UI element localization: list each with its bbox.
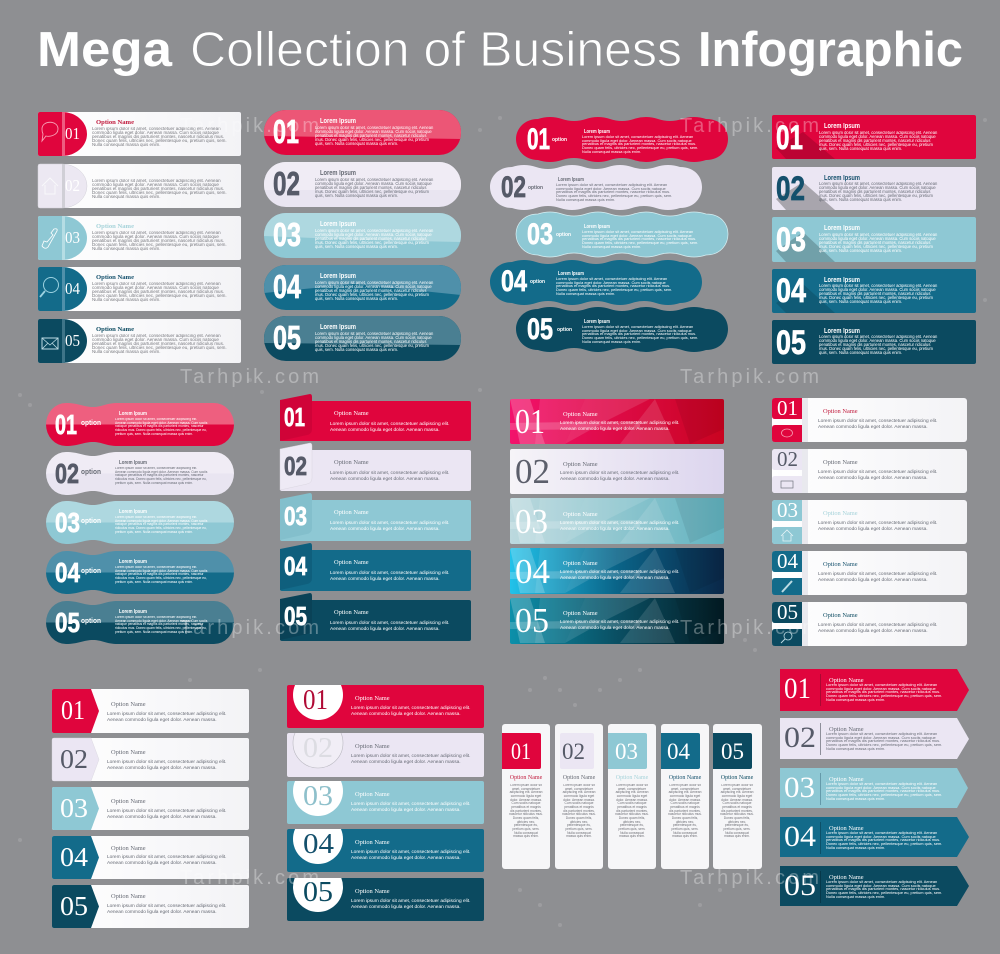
row 02	[38, 164, 241, 208]
watermarks: Tarhpik.com	[680, 617, 820, 639]
row 02	[772, 447, 967, 493]
column 05: Option Name	[721, 775, 754, 781]
row 03: Aenean commodo ligula eget dolor. Aenean massa.	[560, 526, 670, 532]
row 05: Lorem Ipsum	[824, 328, 860, 335]
row 03: Aenean commodo ligula eget dolor. Aenean massa.	[351, 807, 461, 813]
title	[37, 23, 963, 77]
panel: arrow banners	[780, 669, 969, 906]
row 03	[772, 498, 967, 544]
row 02: Aenean commodo ligula eget dolor. Aenean massa.	[818, 475, 928, 481]
row 04: Aenean commodo ligula eget dolor. Aenean massa.	[818, 577, 928, 583]
row 05: Lorem ipsum dolor sit amet, consectetuer adipiscing elit.	[330, 621, 449, 626]
row 03: 03	[284, 501, 307, 531]
row 02: 02	[284, 451, 307, 481]
row 02	[510, 449, 724, 494]
row 05: Aenean commodo ligula eget dolor. Aenean massa.	[818, 628, 928, 634]
row 03: Lorem ipsum dolor sit amet, consectetuer adipiscing elit.	[351, 802, 470, 807]
row 05	[38, 319, 241, 363]
row 02: 02	[777, 447, 798, 471]
row 03	[52, 787, 249, 830]
column 02	[555, 724, 603, 869]
row 01: Aenean commodo ligula eget dolor. Aenean massa.	[560, 426, 670, 432]
column 03: Lorem ipsum dolor sit amet, consectetuer adipiscing elit. Aenean commodo ligula eget dolor. Aenean massa. Cum sociis natoque penatibus et magnis dis parturient montes, nascetur ridiculus mus. Donec quam felis, ultricies nec, pellentesque eu, pretium quis, sem. Nulla consequat massa quis enim.	[615, 784, 649, 838]
row 03	[510, 498, 724, 544]
row 01: 01	[55, 409, 77, 440]
row 02: Aenean commodo ligula eget dolor. Aenean massa.	[351, 759, 461, 765]
row 03: Lorem ipsum dolor sit amet, consectetuer adipiscing elit.	[818, 521, 937, 526]
row 01: Lorem ipsum dolor sit amet, consectetuer adipiscing elit.	[351, 706, 470, 711]
watermarks: Tarhpik.com	[180, 867, 320, 889]
row 05: Lorem Ipsum	[320, 324, 356, 331]
row 01: Lorem ipsum dolor sit amet, consectetuer adipiscing elit.	[818, 419, 937, 424]
row 05	[287, 878, 484, 921]
column 03: Option Name	[616, 775, 649, 781]
row 04: Option Name	[111, 845, 146, 852]
row 03: Lorem Ipsum	[320, 221, 356, 228]
row 03	[780, 768, 968, 808]
column 01	[502, 724, 550, 869]
row 02: 02	[55, 458, 79, 489]
row 03	[772, 217, 976, 262]
column 01: Option Name	[510, 775, 543, 781]
panel: banners with white circle numbers	[287, 670, 484, 921]
row 04: 04	[65, 279, 80, 298]
row 03: Lorem Ipsum	[584, 224, 610, 230]
row 01: 01	[284, 402, 305, 432]
row 01: 01	[784, 672, 811, 705]
row 04: 04	[515, 552, 550, 591]
watermarks: Tarhpik.com	[180, 617, 320, 639]
row 05: Aenean commodo ligula eget dolor. Aenean massa.	[351, 904, 461, 910]
panel: wavy staggered banners	[490, 117, 728, 352]
row 02	[46, 452, 234, 495]
row 03: Lorem ipsum dolor sit amet, consectetuer adipiscing elit.	[330, 521, 449, 526]
row 01	[52, 689, 249, 733]
row 02: Option Name	[111, 749, 146, 756]
row 05: Option Name	[563, 610, 598, 617]
row 01: Aenean commodo ligula eget dolor. Aenean massa.	[818, 424, 928, 430]
row 04: Option Name	[96, 274, 134, 281]
row 01: option	[552, 137, 568, 143]
row 01	[780, 669, 969, 711]
column 03: 03	[615, 739, 638, 764]
row 03: Aenean commodo ligula eget dolor. Aenean massa.	[107, 814, 217, 820]
row 05: 05	[65, 331, 80, 350]
row 05: 05	[273, 319, 301, 356]
row 05: Lorem ipsum dolor sit amet, consectetuer adipiscing elit.	[107, 904, 226, 909]
row 05: Option Name	[96, 326, 134, 333]
row 05: 05	[55, 607, 80, 638]
row 02: Lorem ipsum dolor sit amet, consectetuer adipiscing elit.	[107, 760, 226, 765]
row 03	[287, 781, 484, 824]
row 05: Option Name	[355, 888, 390, 895]
column 05	[713, 724, 762, 869]
row 05: option	[557, 327, 573, 333]
row 02: 02	[303, 732, 333, 764]
row 03: 03	[515, 502, 548, 541]
row 02: 02	[273, 165, 300, 202]
row 02	[264, 162, 461, 207]
row 01	[46, 403, 234, 446]
row 01: Lorem ipsum dolor sit amet, consectetuer adipiscing elit.	[107, 712, 226, 717]
row 04: Lorem Ipsum	[119, 559, 147, 565]
row 03: Option Name	[563, 511, 598, 518]
row 05: 05	[284, 601, 307, 631]
row 04: Option Name	[334, 559, 369, 566]
row 01	[516, 117, 728, 162]
row 01: Option Name	[563, 411, 598, 418]
row 02: Lorem Ipsum	[558, 177, 584, 183]
row 05: 05	[515, 601, 549, 640]
row 02: Option Name	[355, 743, 390, 750]
watermarks: Tarhpik.com	[180, 366, 320, 388]
row 01: 01	[65, 124, 80, 143]
row 03: Lorem ipsum dolor sit amet, consectetuer adipiscing elit.	[107, 809, 226, 814]
watermarks: Tarhpik.com	[180, 115, 320, 137]
row 02: 02	[65, 176, 80, 195]
row 05: 05	[303, 876, 333, 908]
row 05: 05	[784, 869, 816, 902]
row 04	[772, 269, 976, 313]
row 01: Aenean commodo ligula eget dolor. Aenean massa.	[330, 427, 440, 433]
row 01	[772, 115, 976, 159]
row 01: Option Name	[111, 701, 146, 708]
row 02: Option Name	[334, 459, 369, 466]
row 05: option	[81, 618, 101, 625]
row 04: 04	[273, 268, 301, 305]
column 04: Lorem ipsum dolor sit amet, consectetuer adipiscing elit. Aenean commodo ligula eget dolor. Aenean massa. Cum sociis natoque penatibus et magnis dis parturient montes, nascetur ridiculus mus. Donec quam felis, ultricies nec, pellentesque eu, pretium quis, sem. Nulla consequat massa quis enim.	[668, 784, 702, 838]
row 04: Lorem ipsum dolor sit amet, consectetuer adipiscing elit.	[330, 571, 449, 576]
row 03: option	[81, 518, 101, 525]
row 03: Option Name	[355, 791, 390, 798]
row 01: Lorem Ipsum	[824, 123, 860, 130]
row 01: Lorem Ipsum	[119, 411, 147, 417]
row 01: 01	[776, 119, 803, 157]
row 04: Lorem ipsum dolor sit amet, consectetuer adipiscing elit.	[560, 570, 679, 575]
row 05: Aenean commodo ligula eget dolor. Aenean massa.	[560, 625, 670, 631]
row 02: Lorem ipsum dolor sit amet, consectetuer adipiscing elit.	[351, 754, 470, 759]
row 04	[510, 548, 724, 594]
row 04: 04	[55, 557, 80, 588]
row 02: Aenean commodo ligula eget dolor. Aenean massa.	[560, 476, 670, 482]
row 04: option	[530, 279, 546, 285]
panel: rectangles with long shadow numbers	[772, 115, 976, 364]
row 04: Lorem Ipsum	[320, 273, 356, 280]
row 01: 01	[527, 123, 550, 156]
row 04: 04	[776, 272, 806, 310]
row 04	[38, 267, 241, 311]
row 01: option	[81, 420, 101, 427]
row 03	[280, 493, 471, 541]
panel: low-poly banners	[510, 399, 724, 644]
row 03: Option Name	[823, 510, 858, 517]
row 04: Lorem ipsum dolor sit amet, consectetuer adipiscing elit.	[351, 850, 470, 855]
row 03	[516, 212, 728, 257]
row 04: option	[81, 568, 101, 575]
row 02: 02	[784, 721, 816, 754]
row 02: Lorem Ipsum	[119, 460, 147, 466]
row 02: 02	[776, 170, 805, 208]
column 02: 02	[562, 739, 585, 764]
panel: half-circle tabs with icons	[38, 112, 241, 363]
row 02: Aenean commodo ligula eget dolor. Aenean massa.	[330, 476, 440, 482]
column 01: Lorem ipsum dolor sit amet, consectetuer adipiscing elit. Aenean commodo ligula eget dolor. Aenean massa. Cum sociis natoque penatibus et magnis dis parturient montes, nascetur ridiculus mus. Donec quam felis, ultricies nec, pellentesque eu, pretium quis, sem. Nulla consequat massa quis enim.	[509, 784, 543, 838]
row 01: Lorem ipsum dolor sit amet, consectetuer adipiscing elit.	[330, 422, 449, 427]
row 04: Aenean commodo ligula eget dolor. Aenean massa.	[330, 576, 440, 582]
row 03: 03	[65, 228, 80, 247]
row 01	[38, 112, 241, 156]
row 01: 01	[61, 695, 85, 725]
row 01: 01	[515, 402, 545, 441]
row 02: Lorem ipsum dolor sit amet, consectetuer adipiscing elit.	[330, 471, 449, 476]
panel: number and icon block cards	[772, 396, 967, 646]
column 03	[608, 724, 656, 869]
row 04: Aenean commodo ligula eget dolor. Aenean massa.	[107, 860, 217, 866]
row 02: Option Name	[823, 459, 858, 466]
row 04	[780, 817, 969, 857]
row 04: Lorem ipsum dolor sit amet, consectetuer adipiscing elit.	[107, 855, 226, 860]
row 04: 04	[501, 265, 527, 298]
row 01: Lorem Ipsum	[320, 118, 356, 125]
row 02	[287, 733, 484, 777]
row 03: Option Name	[334, 509, 369, 516]
row 02: option	[81, 469, 101, 476]
row 02: Lorem ipsum dolor sit amet, consectetuer adipiscing elit.	[818, 470, 937, 475]
row 05: Lorem ipsum dolor sit amet, consectetuer adipiscing elit.	[818, 623, 937, 628]
row 01: 01	[303, 684, 328, 716]
row 03: Lorem ipsum dolor sit amet, consectetuer adipiscing elit.	[560, 521, 679, 526]
row 04: Option Name	[355, 839, 390, 846]
row 05	[780, 866, 969, 906]
column 05: 05	[721, 739, 744, 764]
row 03: Lorem Ipsum	[119, 509, 147, 515]
row 02: 02	[515, 452, 550, 491]
title: Infographic	[698, 23, 963, 77]
row 05: Option Name	[334, 609, 369, 616]
panel: folded tab banners	[280, 394, 471, 641]
panel: two-tone pills	[264, 110, 461, 361]
row 05: 05	[776, 324, 806, 362]
row 03: Option Name	[96, 223, 134, 230]
row 01	[510, 399, 724, 444]
row 02	[772, 167, 976, 210]
column 01: 01	[511, 739, 531, 764]
row 03: 03	[303, 780, 333, 812]
row 01: Option Name	[96, 119, 134, 126]
row 03: Lorem Ipsum	[824, 225, 860, 232]
row 04: 04	[60, 842, 89, 872]
panel: vertical cards	[502, 724, 762, 869]
row 05: 05	[60, 891, 88, 921]
row 04: 04	[777, 549, 798, 573]
row 03	[38, 216, 241, 260]
row 01: Option Name	[355, 695, 390, 702]
row 04	[490, 260, 702, 305]
row 03: 03	[60, 793, 88, 823]
row 03: 03	[784, 771, 815, 804]
title: Mega	[37, 23, 173, 77]
row 02: Aenean commodo ligula eget dolor. Aenean massa.	[107, 765, 217, 771]
watermarks	[180, 115, 820, 889]
column 02: Lorem ipsum dolor sit amet, consectetuer adipiscing elit. Aenean commodo ligula eget dolor. Aenean massa. Cum sociis natoque penatibus et magnis dis parturient montes, nascetur ridiculus mus. Donec quam felis, ultricies nec, pellentesque eu, pretium quis, sem. Nulla consequat massa quis enim.	[562, 784, 596, 838]
row 04: Option Name	[563, 560, 598, 567]
row 04: Option Name	[829, 825, 864, 832]
row 03: Option Name	[111, 798, 146, 805]
row 02: Lorem Ipsum	[824, 175, 860, 182]
row 03: 03	[55, 507, 80, 538]
row 04: Aenean commodo ligula eget dolor. Aenean massa.	[351, 855, 461, 861]
row 01: Option Name	[334, 410, 369, 417]
row 01: Aenean commodo ligula eget dolor. Aenean massa.	[107, 717, 217, 723]
row 01	[280, 394, 471, 441]
row 05: Option Name	[111, 893, 146, 900]
watermarks: Tarhpik.com	[680, 366, 820, 388]
row 04: Aenean commodo ligula eget dolor. Aenean massa.	[560, 575, 670, 581]
row 01: Option Name	[829, 677, 864, 684]
row 03: 03	[776, 221, 806, 259]
row 03: Aenean commodo ligula eget dolor. Aenean massa.	[818, 526, 928, 532]
column 04	[661, 724, 709, 869]
row 01: 01	[777, 396, 798, 420]
row 02: Option Name	[563, 461, 598, 468]
row 01: 01	[273, 113, 299, 150]
row 05: Option Name	[823, 612, 858, 619]
row 01: Lorem ipsum dolor sit amet, consectetuer adipiscing elit.	[560, 421, 679, 426]
column 04: 04	[667, 739, 690, 764]
row 02: 02	[60, 744, 88, 774]
column 05: Lorem ipsum dolor sit amet, consectetuer adipiscing elit. Aenean commodo ligula eget dolor. Aenean massa. Cum sociis natoque penatibus et magnis dis parturient montes, nascetur ridiculus mus. Donec quam felis, ultricies nec, pellentesque eu, pretium quis, sem. Nulla consequat massa quis enim.	[720, 784, 754, 838]
row 02	[490, 165, 702, 210]
row 04	[772, 549, 967, 595]
row 05: Lorem ipsum dolor sit amet, consectetuer adipiscing elit.	[560, 620, 679, 625]
row 05	[52, 885, 249, 928]
row 02	[780, 718, 969, 759]
row 05	[510, 598, 724, 644]
row 04: 04	[284, 551, 307, 581]
row 05: Option Name	[829, 874, 864, 881]
row 03: 03	[777, 498, 798, 522]
row 03	[46, 501, 234, 544]
row 05: 05	[777, 600, 798, 624]
row 03: option	[556, 232, 572, 238]
row 04: Option Name	[823, 561, 858, 568]
row 04: 04	[784, 820, 816, 853]
watermarks: Tarhpik.com	[680, 867, 820, 889]
row 01	[772, 396, 967, 442]
row 02: Lorem Ipsum	[320, 170, 356, 177]
row 05	[46, 601, 234, 644]
row 05	[264, 316, 461, 361]
row 04	[264, 265, 461, 310]
row 04: Lorem Ipsum	[824, 277, 860, 284]
row 03: Option Name	[829, 776, 864, 783]
row 04	[52, 836, 249, 879]
row 01: Option Name	[823, 408, 858, 415]
row 05: 05	[527, 313, 553, 346]
row 05	[280, 593, 471, 641]
row 04: 04	[303, 828, 335, 860]
row 03	[264, 213, 461, 258]
row 05: Lorem Ipsum	[119, 609, 147, 615]
row 01: Aenean commodo ligula eget dolor. Aenean massa.	[351, 711, 461, 717]
row 02	[280, 443, 471, 491]
row 04	[46, 551, 234, 594]
row 05	[516, 307, 728, 352]
row 02	[52, 738, 249, 781]
row 04	[280, 543, 471, 591]
row 03: 03	[273, 216, 301, 253]
row 05: Lorem Ipsum	[584, 319, 610, 325]
row 01	[264, 110, 461, 155]
title: Collection of Business	[190, 23, 682, 77]
row 03: 03	[527, 218, 553, 251]
row 03: Aenean commodo ligula eget dolor. Aenean massa.	[330, 526, 440, 532]
row 05: Aenean commodo ligula eget dolor. Aenean massa.	[107, 909, 217, 915]
panel: pentagon number cards	[52, 689, 249, 928]
column 04: Option Name	[669, 775, 702, 781]
row 05: Lorem ipsum dolor sit amet, consectetuer adipiscing elit.	[351, 899, 470, 904]
row 02: option	[528, 185, 544, 191]
row 01: Lorem Ipsum	[584, 129, 610, 135]
row 02: Lorem ipsum dolor sit amet, consectetuer adipiscing elit.	[560, 471, 679, 476]
column 02: Option Name	[563, 775, 596, 781]
row 05	[772, 600, 967, 646]
row 04: Lorem ipsum dolor sit amet, consectetuer adipiscing elit.	[818, 572, 937, 577]
watermarks: Tarhpik.com	[680, 115, 820, 137]
row 04	[287, 829, 484, 872]
row 05: Aenean commodo ligula eget dolor. Aenean massa.	[330, 626, 440, 632]
panel: necked two-tone pills	[46, 403, 234, 644]
row 04: Lorem Ipsum	[558, 271, 584, 277]
row 02: Option Name	[829, 726, 864, 733]
row 02: 02	[501, 171, 526, 204]
row 01	[287, 685, 484, 728]
row 05	[772, 320, 976, 364]
